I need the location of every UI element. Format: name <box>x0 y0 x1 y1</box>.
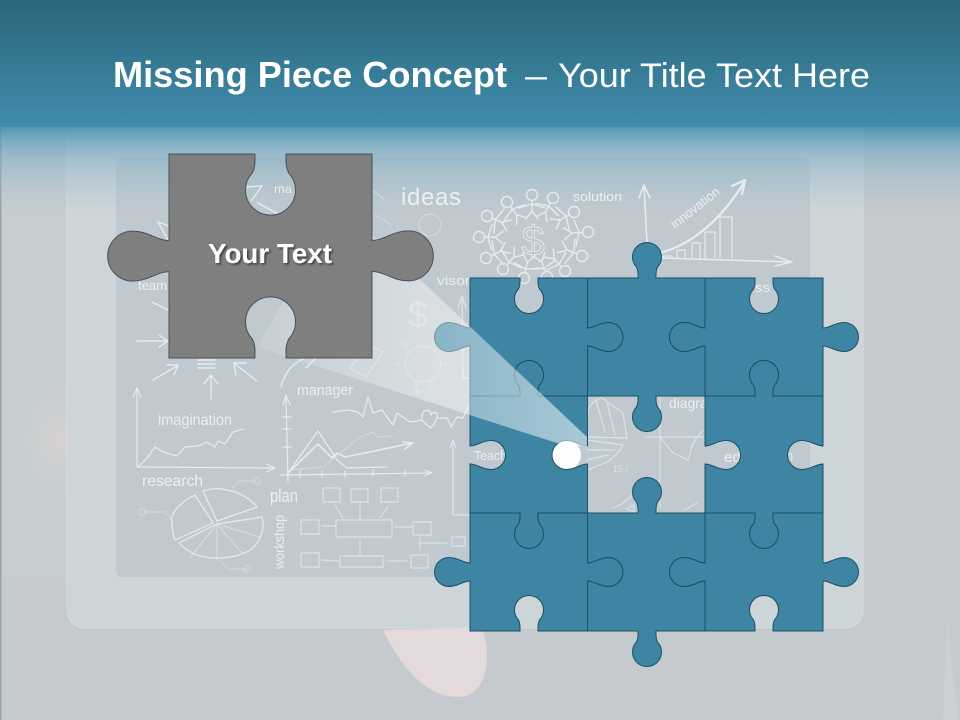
title: Your Title Text Here <box>558 57 870 95</box>
sketch: line chart with arrow <box>280 395 432 482</box>
piece: row 3 column 2 <box>588 478 705 666</box>
label: manager: manager <box>297 382 353 399</box>
label: ed: ed <box>724 449 741 466</box>
label: ma: ma <box>274 182 292 196</box>
piece: row 1 column 2 <box>588 242 705 432</box>
puzzle grid with missing piece <box>434 242 858 667</box>
label: solution: solution <box>573 189 622 204</box>
sketch: right axis <box>450 296 470 515</box>
title: Missing Piece Concept <box>113 54 507 95</box>
piece label: Your Text <box>208 238 332 269</box>
piece: row 3 column 1 <box>434 513 623 631</box>
title <box>113 54 870 95</box>
label: research: research <box>142 473 203 490</box>
sketch: radial arrows <box>137 186 322 399</box>
sketch: people circle with dollar <box>473 187 594 286</box>
piece: row 2 column 3 <box>705 360 823 548</box>
sketch: people circle with dollar: $ <box>521 217 545 264</box>
sketch: faint bulb, dollar and book: $ <box>408 294 428 335</box>
sketch: pie chart <box>138 478 263 572</box>
loose gray puzzle piece <box>108 154 433 358</box>
tablet sketches <box>133 180 793 572</box>
white glow in the empty socket <box>551 440 581 470</box>
sketch: heartbeat line <box>333 397 468 428</box>
sketch: imagination chart <box>133 388 275 472</box>
label: innovation: innovation <box>668 184 723 231</box>
piece: row 2 column 1 <box>470 360 588 549</box>
label: Teach: Teach <box>474 448 507 463</box>
label: team: team <box>138 278 167 293</box>
light beam from loose piece to socket <box>257 204 587 447</box>
label: ideas: ideas <box>401 184 461 211</box>
label: n: n <box>786 448 793 463</box>
sketch labels <box>138 182 793 570</box>
label: ss: ss <box>755 280 771 295</box>
sketch: content of the missing slot <box>587 397 703 512</box>
sketch: innovation growth chart <box>639 180 792 266</box>
title: – <box>525 57 547 95</box>
sketch: faint bulb, dollar and book <box>350 190 451 392</box>
label: plan: plan <box>270 486 298 506</box>
label: diagram: diagram <box>669 395 719 411</box>
label: workshop: workshop <box>271 515 287 570</box>
title band <box>0 0 960 127</box>
piece: row 3 column 3 <box>670 513 858 631</box>
label: imagination: imagination <box>158 412 232 429</box>
piece: row 1 column 3 <box>670 278 858 396</box>
label: y and 15: 15 / <box>613 464 629 474</box>
piece: row 1 column 1 <box>434 278 623 396</box>
label: visor: visor <box>437 273 471 288</box>
sketch: flow chart <box>301 488 465 568</box>
